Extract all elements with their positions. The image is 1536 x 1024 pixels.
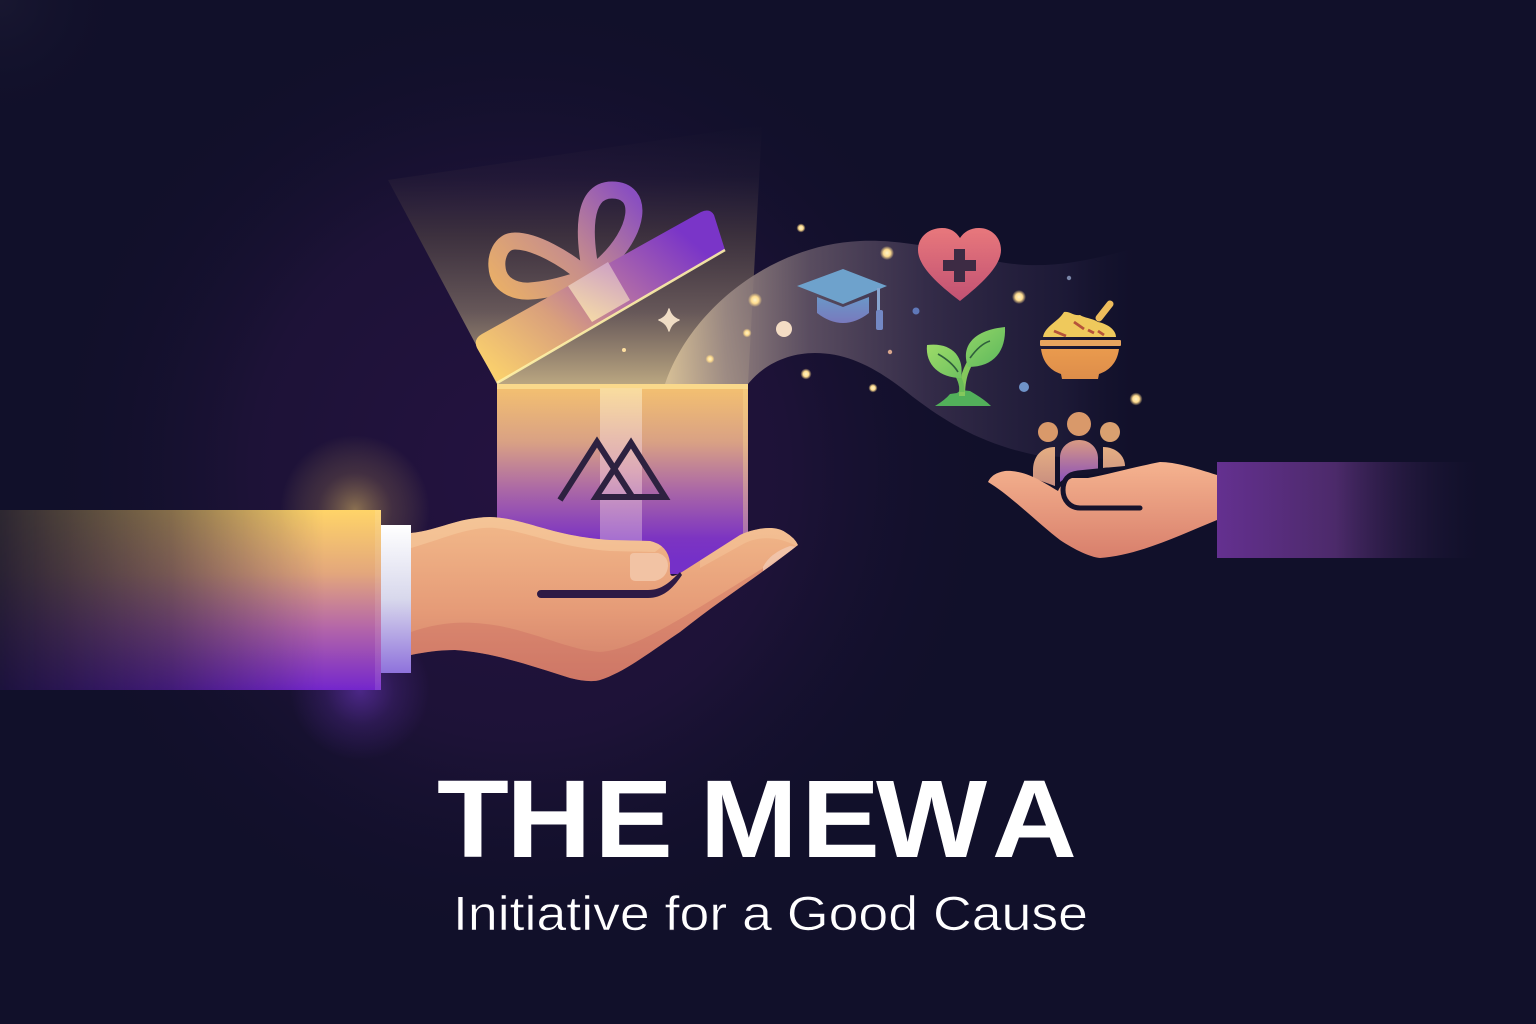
finger nail — [630, 553, 668, 581]
cuff glows — [280, 435, 430, 760]
left sleeve — [0, 510, 381, 690]
sparkle — [659, 309, 679, 331]
box ribbon — [600, 388, 642, 553]
palm shading — [411, 517, 798, 682]
light beam from gift box — [388, 125, 762, 384]
icon: food bowl — [1040, 304, 1121, 379]
flowing stream of light — [665, 241, 1135, 460]
icon: graduation cap — [797, 269, 887, 330]
icon: sprout — [927, 327, 1005, 406]
subtitle: Initiative for a Good Cause — [453, 888, 1088, 941]
open palm — [988, 462, 1217, 558]
icon: mountain logo — [560, 442, 665, 500]
thumb nail — [763, 546, 796, 571]
gift lid — [476, 211, 725, 383]
title: THE MEWA — [437, 759, 1077, 881]
floating light particles — [622, 224, 1142, 406]
right sleeve — [1217, 462, 1480, 558]
palm crease — [537, 572, 682, 598]
open palm — [411, 517, 798, 681]
icon: heart with cross — [918, 228, 1001, 301]
icon: people group — [1033, 412, 1125, 486]
gift box — [497, 384, 748, 574]
bow — [497, 190, 634, 291]
giving hand — [0, 510, 800, 700]
receiving hand — [988, 462, 1480, 558]
shirt cuff — [381, 525, 411, 673]
